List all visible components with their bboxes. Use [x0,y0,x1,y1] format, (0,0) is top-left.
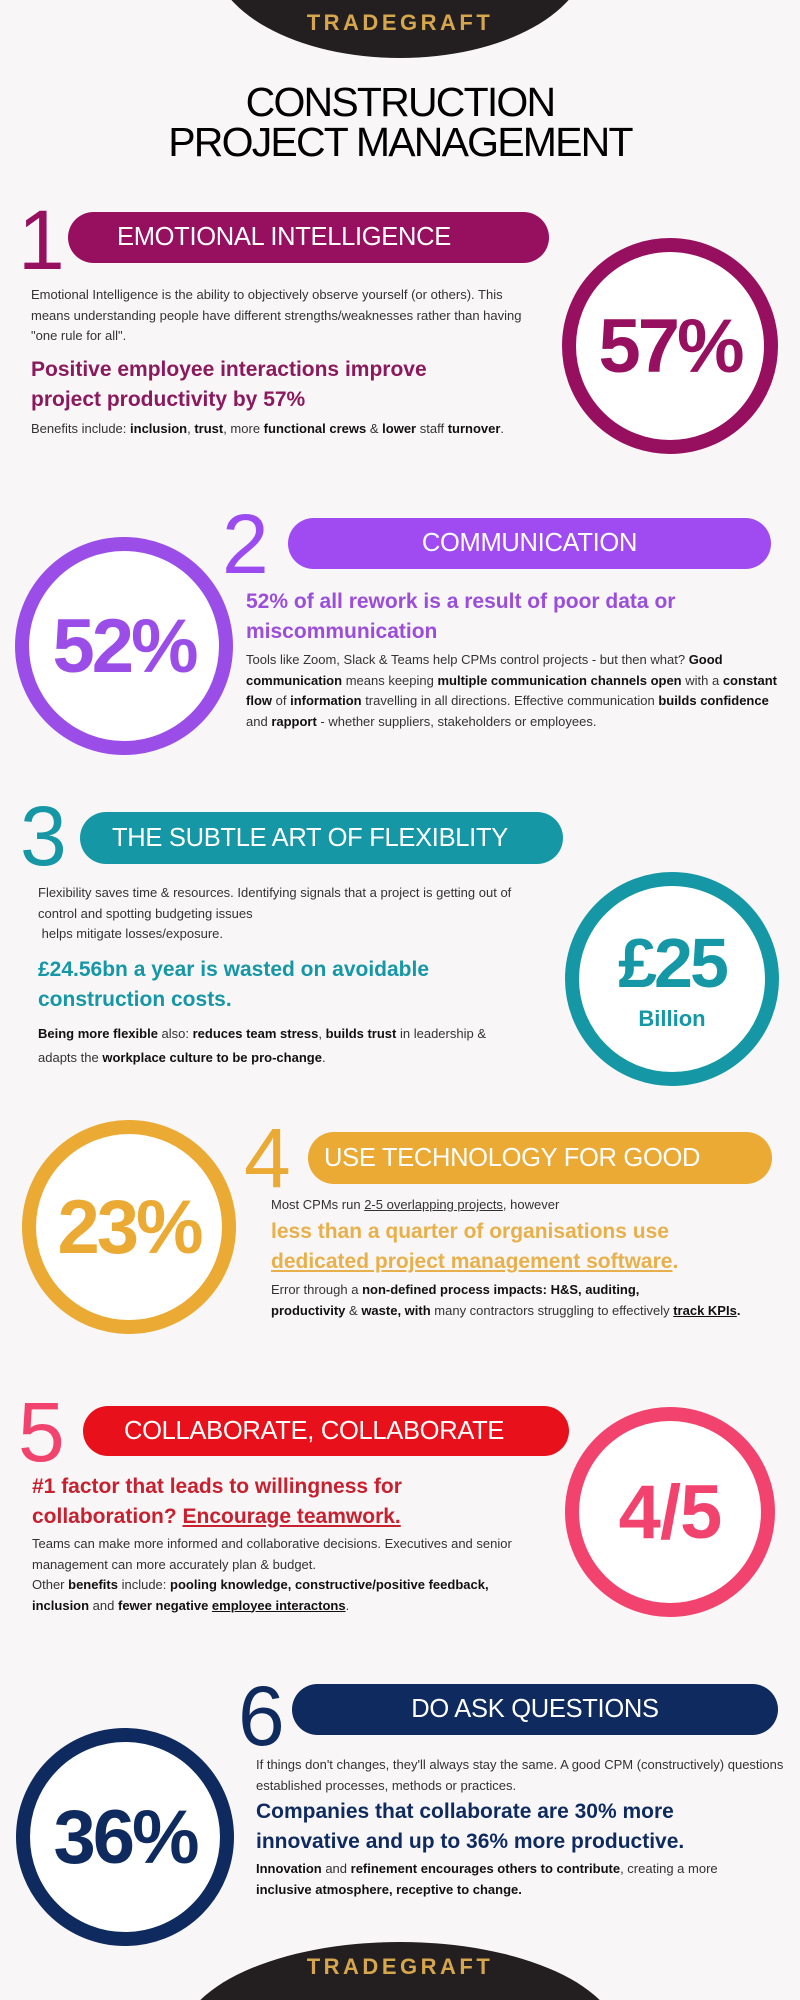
section 1 [18,193,778,454]
headline stat: less than a quarter of organisations use dedicated project management software. [271,1220,678,1273]
benefits text: Benefits include: inclusion, trust, more functional crews & lower staff turnover. [31,421,504,436]
circle 57% [562,238,778,454]
heading pill: communication [288,518,771,569]
headline stat: #1 factor that leads to willingness for collaboration? Encourage teamwork. [32,1475,402,1528]
top logo badge [212,0,588,58]
circle 4/5: 4/5 [619,1470,721,1554]
heading pill: emotional intelligence [68,212,549,263]
circle 52% [15,537,233,755]
section 6 [16,1669,783,1946]
circle £25 Billion: £25 [618,924,726,1002]
section 5 [18,1385,775,1617]
circle 36%: 36% [53,1794,197,1880]
heading pill: technology: USE TECHNOLOGY FOR GOOD [324,1144,700,1172]
number 2: 2 [222,497,269,591]
circle 36% [16,1728,234,1946]
circle 52%: 52% [52,604,196,688]
headline stat: Positive employee interactions improve project productivity by 57% [31,358,427,411]
heading pill: communication: COMMUNICATION [422,529,637,557]
heading pill: collaborate [83,1406,569,1456]
circle £25 Billion [565,872,779,1086]
body text 2: Being more flexible also: reduces team stress, builds trust in leadership & adapts the workplace culture to be pro-change. [38,1026,486,1065]
logo text bottom: TRADEGRAFT [307,1954,493,1979]
number 4: 4 [244,1111,291,1205]
body text 2: Innovation and refinement encourages others to contribute, creating a more inclusive atmosphere, receptive to change. [256,1861,718,1896]
body text 2: productivity & waste, with many contractors struggling to effectively track KPIs. [271,1302,740,1318]
body text 2: Error through a non-defined process impacts: H&S, auditing, [271,1282,639,1297]
body text [32,1536,512,1612]
bottom logo badge [180,1942,620,2000]
title: PROJECT MANAGEMENT [168,119,632,165]
body text: Flexibility saves time & resources. Identifying signals that a project is getting out of control and spotting budgeting issues [38,885,511,920]
body text: Teams can make more informed and collaborative decisions. Executives and senior management can more accurately plan & budget. [32,1536,512,1572]
number 3: 3 [20,789,67,883]
headline stat: Companies that collaborate are 30% more innovative and up to 36% more productive. [256,1800,684,1853]
body text: Other benefits include: pooling knowledge, constructive/positive feedback, inclusion and fewer negative employee interactons. [32,1577,489,1612]
heading pill: technology [308,1132,772,1184]
body text: Most CPMs run 2-5 overlapping projects, however [271,1197,559,1212]
body text [38,885,512,941]
body text: Emotional Intelligence is the ability to objectively observe yourself (or others). This means understanding people have different strengths/weaknesses rather than having "one rule for all". [31,287,521,343]
heading pill: flexibility [80,812,563,864]
number 6: 6 [238,1669,285,1763]
circle 4/5 [565,1407,775,1617]
headline stat: 52% of all rework is a result of poor data or miscommunication [246,590,675,643]
title: CONSTRUCTION [246,79,554,125]
section 2 [15,497,777,755]
body text 2 [271,1282,740,1318]
heading pill: ask questions: DO ASK QUESTIONS [411,1695,659,1723]
circle £25 Billion: Billion [638,1006,706,1031]
number 1: 1 [18,193,65,287]
headline stat: £24.56bn a year is wasted on avoidable construction costs. [38,958,429,1011]
section 3 [20,789,779,1086]
body text: helps mitigate losses/exposure. [42,926,223,941]
section 4 [22,1111,772,1334]
circle 57%: 57% [598,304,742,388]
heading pill: emotional intelligence: EMOTIONAL INTELLIGENCE [117,223,451,251]
heading pill: flexibility: THE SUBTLE ART OF FLEXIBLITY [112,824,508,852]
title [168,79,633,165]
body text: Tools like Zoom, Slack & Teams help CPMs control projects - but then what? Good communication means keeping multiple communication channels open with a constant flow of information travelling in all directions. Effective communication builds confidence and rapport - whether suppliers, stakeholders or employees. [246,652,777,728]
circle 23%: 23% [57,1184,201,1270]
heading pill: ask questions [292,1684,778,1735]
number 5: 5 [18,1385,65,1479]
logo text top: TRADEGRAFT [307,10,493,35]
body text: If things don't changes, they'll always stay the same. A good CPM (constructively) questions established processes, methods or practices. [256,1757,783,1792]
circle 23% [22,1120,236,1334]
heading pill: collaborate: COLLABORATE, COLLABORATE [124,1416,504,1444]
